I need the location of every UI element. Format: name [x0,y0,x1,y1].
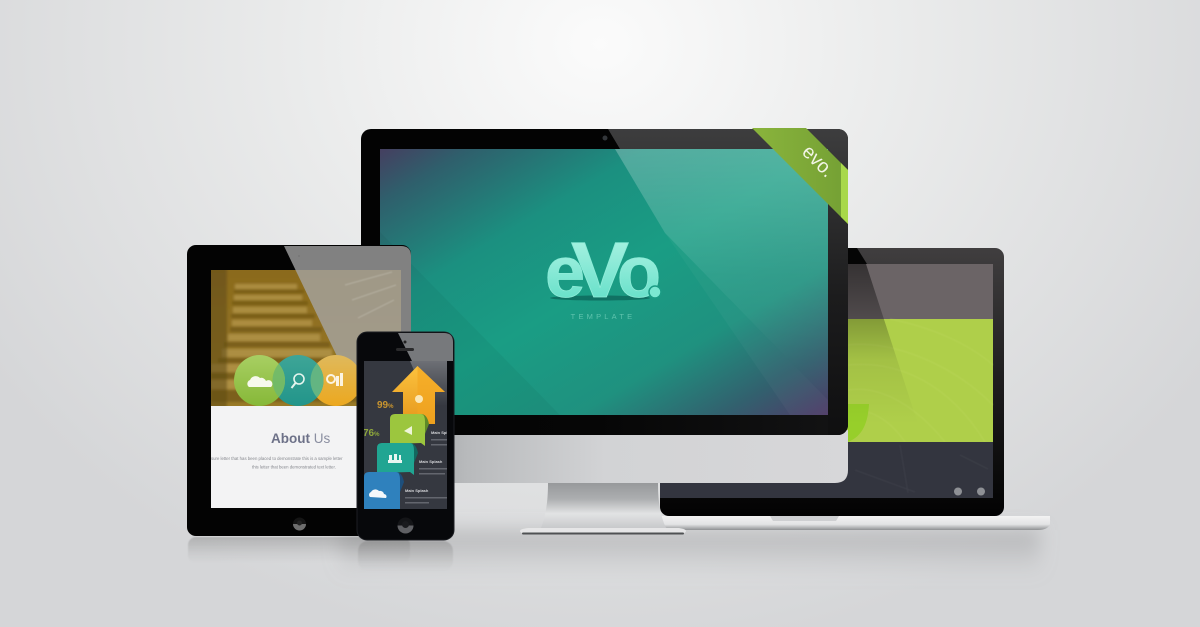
phone body [357,332,454,540]
tablet glare rows [345,272,396,318]
logo: eVo.: o [617,233,661,313]
circle overlaps [272,364,324,398]
logo: eVo.: e [545,233,585,313]
logo subtitle: TEMPLATE [571,312,635,321]
step captions [405,432,447,493]
about body text: sure letter that has been placed to demonstrate this is a sample letter [211,456,343,461]
monitor camera [602,136,608,140]
laptop glare shadow [848,264,918,424]
floor shadows and reflections [188,530,1040,576]
phone top glare [398,333,453,361]
blue step [364,472,404,509]
laptop lid [660,248,1004,516]
screen glare [615,149,828,344]
green circle [234,355,285,406]
circle icons [234,355,362,406]
step captions: Main Splash [405,488,429,493]
tablet screen [205,265,405,508]
corner ribbon [752,128,848,224]
arrow [392,366,445,424]
green step [390,414,429,446]
tablet glare [284,246,411,400]
laptop [660,248,1050,530]
monitor [361,128,848,534]
ribbon label: evo. [797,141,838,182]
about body text: this letter that been demonstrated text letter. [252,464,336,470]
orange circle [310,355,362,406]
phone screen [363,361,455,509]
monitor chin [361,430,848,483]
logo: eVo.: V [571,226,629,314]
logo: eVo. [545,226,661,314]
phone home button [398,518,414,534]
step captions: Main Splash [431,430,455,435]
phone [357,332,455,540]
laptop base [660,516,1050,530]
monitor stand [520,483,686,534]
tablet home button [293,518,306,530]
about panel [211,406,356,508]
tablet camera [298,255,300,257]
teal circle [272,355,324,406]
step caption lines [405,439,447,504]
phone speaker [396,348,414,351]
stairs photo [211,270,401,406]
laptop screen [660,264,993,498]
percent 76: 76% [363,428,380,439]
step captions: Main Splash [419,459,443,464]
monitor screen [380,149,828,415]
teal step [377,443,418,475]
percent 99: 99% [377,400,394,411]
monitor bezel [361,129,848,435]
about body text [211,456,342,468]
tablet [187,245,411,536]
phone camera [404,340,406,344]
laptop slider dots [954,488,985,496]
about heading: About Us [271,431,330,446]
tablet body [187,245,411,536]
